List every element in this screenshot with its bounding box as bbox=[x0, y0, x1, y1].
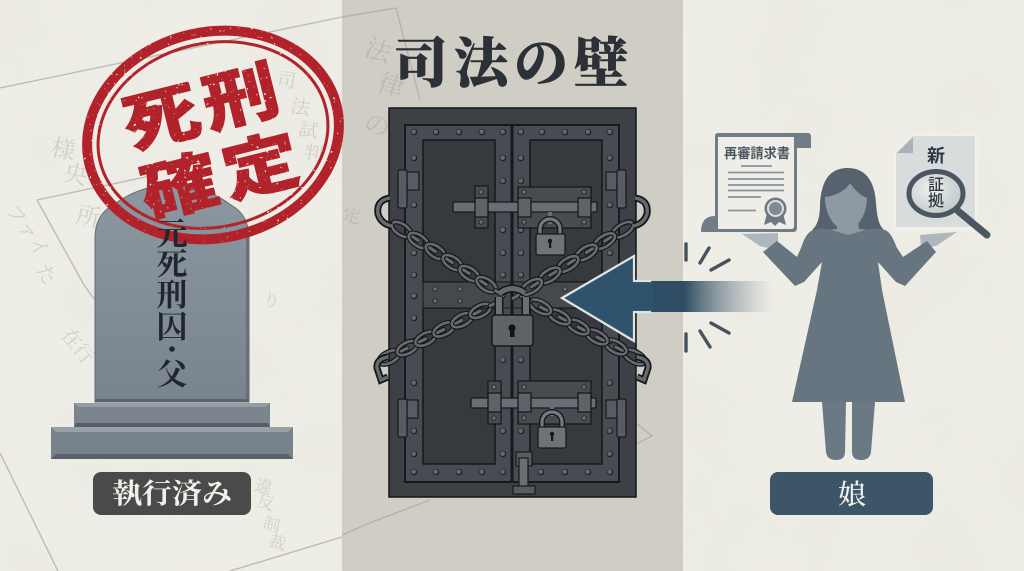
background: faded legal document left: 判 bbox=[302, 141, 325, 166]
gravestone inscription: 囚 bbox=[156, 302, 188, 347]
hinges bbox=[398, 170, 626, 437]
label: daughter: 娘 bbox=[838, 473, 866, 513]
gravestone inscription: 元 bbox=[156, 209, 188, 254]
gravestone inscription: 父 bbox=[156, 349, 188, 394]
magnifier bbox=[909, 171, 987, 235]
background: faded legal text center: 法 bbox=[361, 33, 396, 69]
dress and arms bbox=[763, 229, 936, 402]
hair bbox=[812, 168, 884, 230]
background: faded legal text center: の bbox=[360, 108, 394, 144]
background: faded legal document left: 裁 bbox=[267, 532, 288, 554]
stamp: death sentence finalized bbox=[66, 6, 360, 264]
gravestone bbox=[51, 185, 293, 459]
upper step bbox=[74, 403, 270, 427]
document: retrial request scroll bbox=[701, 133, 811, 232]
gravestone inscription: 刑 bbox=[156, 270, 188, 315]
label: executed bbox=[93, 472, 251, 515]
background: faded legal document left: 所 bbox=[74, 201, 103, 233]
door panels bbox=[423, 140, 602, 464]
center padlock bbox=[492, 288, 533, 346]
background: faded legal document left: 制 bbox=[261, 514, 282, 536]
background: faded legal text center bbox=[341, 8, 652, 535]
background: faded legal document left: 在 bbox=[56, 323, 87, 354]
background: faded legal document left: 反 bbox=[255, 492, 276, 514]
impact marks bbox=[686, 244, 729, 351]
document: new evidence with magnifier bbox=[896, 136, 987, 235]
background: faded legal document left: 央 bbox=[61, 159, 90, 191]
label: daughter bbox=[770, 472, 933, 515]
background: faded legal document left bbox=[0, 17, 342, 571]
background: faded legal document left: 行 bbox=[68, 338, 99, 369]
background: faded legal document left: 違 bbox=[253, 476, 274, 498]
stamp: death sentence finalized: 確定 bbox=[130, 106, 315, 237]
lower latch bbox=[471, 381, 596, 424]
magnifier: 拠 bbox=[928, 187, 944, 211]
arrow: pushing against door bbox=[562, 256, 772, 341]
panel: center column bbox=[342, 0, 683, 571]
background: faded legal document left: 法 bbox=[289, 95, 313, 120]
upper padlock bbox=[536, 212, 565, 255]
hands bbox=[742, 233, 778, 250]
upper latch bbox=[453, 186, 597, 228]
seal bbox=[764, 198, 786, 226]
document: retrial request scroll: 再審請求書 bbox=[724, 142, 790, 162]
background: faded legal document left: 試 bbox=[297, 118, 320, 143]
lower step bbox=[51, 427, 293, 459]
floor bolt bbox=[513, 452, 535, 494]
rivets bbox=[411, 129, 613, 475]
gravestone inscription: 死 bbox=[156, 239, 188, 284]
background: faded legal document left: 司 bbox=[275, 68, 298, 93]
label: executed: 執行済み bbox=[112, 472, 232, 512]
document: new evidence with magnifier: 新 bbox=[927, 142, 945, 168]
title: 司法の壁 bbox=[394, 21, 634, 98]
background: faded legal text center: 律 bbox=[374, 68, 408, 104]
chains bbox=[377, 198, 648, 380]
lower padlock bbox=[538, 405, 566, 448]
background: faded legal document left: 様 bbox=[49, 134, 78, 166]
background: faded legal document left: た bbox=[31, 260, 60, 289]
woman silhouette bbox=[742, 168, 957, 460]
background: faded legal document left: り bbox=[261, 290, 281, 312]
legs bbox=[822, 402, 875, 460]
background: faded legal text center: 定 bbox=[341, 203, 363, 228]
gravestone inscription bbox=[156, 209, 188, 394]
background: faded legal document left: ファイ bbox=[1, 200, 53, 262]
face bbox=[825, 183, 867, 230]
stamp: death sentence finalized: 死刑 bbox=[112, 38, 293, 167]
iron door bbox=[389, 108, 636, 497]
magnifier: 証 bbox=[928, 171, 944, 195]
